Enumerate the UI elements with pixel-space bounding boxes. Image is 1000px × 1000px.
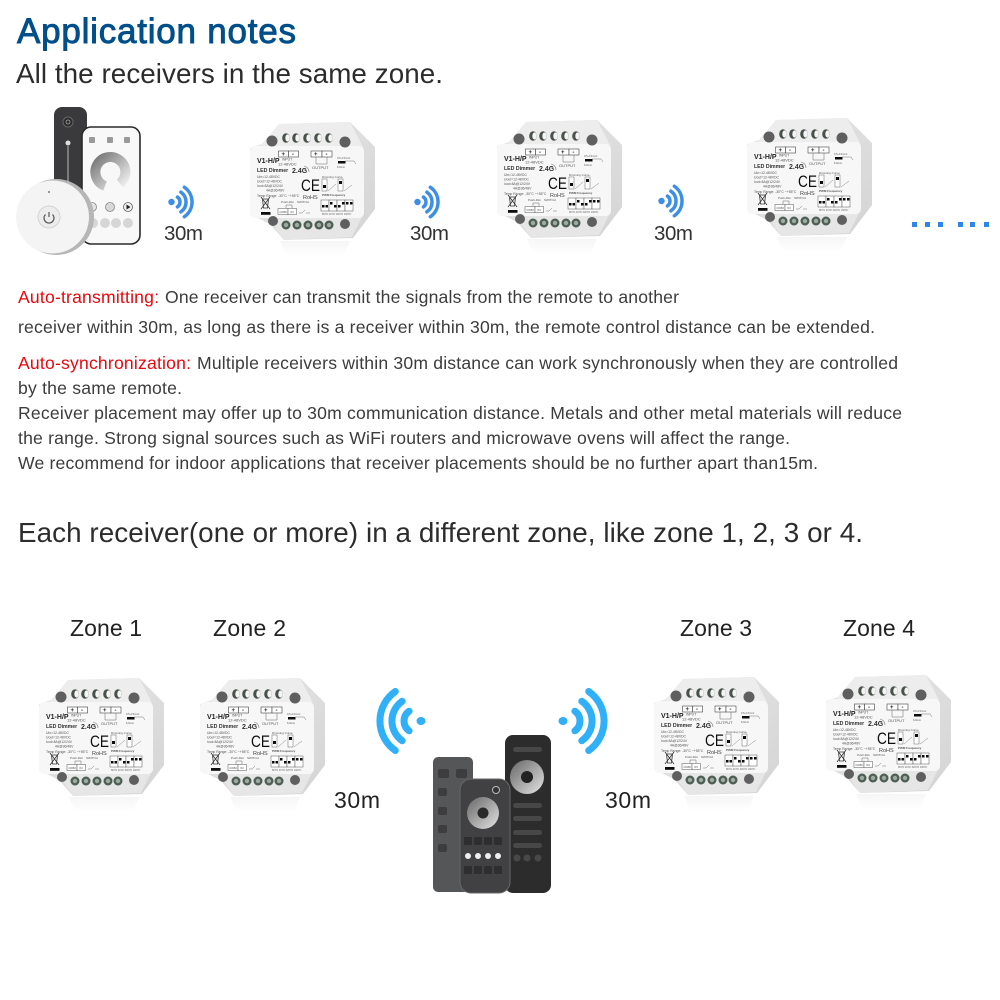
- text block: auto-synchronization: Auto-synchronization:: [18, 353, 191, 373]
- right distance label: 30m: [605, 787, 651, 813]
- text block: auto-transmitting: One receiver can transmit the signals from the remote to another: [165, 287, 679, 307]
- dark remote controls group: [433, 735, 551, 893]
- zone 3 receiver: [654, 677, 779, 810]
- wifi icon 3: [660, 186, 682, 216]
- zone 2 label: Zone 2: [213, 615, 286, 641]
- distance label 1: 30m: [164, 222, 203, 245]
- zone 3 label: Zone 3: [680, 615, 752, 641]
- left distance label: 30m: [334, 787, 380, 813]
- title: Application notes: [17, 12, 296, 51]
- black slider remote: [54, 107, 87, 197]
- continuation dots: [912, 222, 989, 227]
- receiver 1: [250, 122, 375, 255]
- zone 4 label: Zone 4: [843, 615, 915, 641]
- zone 1 receiver: [39, 678, 164, 811]
- receiver 2: [497, 120, 622, 253]
- distance label 2: 30m: [410, 222, 449, 245]
- distance label 3: 30m: [654, 222, 693, 245]
- text block: auto-transmitting: receiver within 30m, as long as there is a receiver within 30m, the remote control distance can be extended.: [18, 317, 875, 337]
- text block: auto-synchronization: Receiver placement may offer up to 30m communication distance. Metals and other metal materials will reduce: [18, 403, 902, 423]
- front remote with wheel: [460, 779, 510, 893]
- white remote with colour wheel: [82, 127, 140, 244]
- receiver 3: [747, 118, 872, 251]
- round white puck remote: [16, 179, 94, 255]
- text block: auto-synchronization: the range. Strong signal sources such as WiFi routers and microwave ovens will affect the range.: [18, 428, 790, 448]
- wifi icon 1: [170, 187, 192, 217]
- text block: auto-transmitting: Auto-transmitting:: [18, 287, 159, 307]
- text block: auto-synchronization: We recommend for indoor applications that receiver placements should be no further apart than15m.: [18, 453, 818, 473]
- wifi icon 2: [416, 187, 438, 217]
- text block: auto-synchronization: Multiple receivers within 30m distance can work synchronously when they are controlled: [197, 353, 898, 373]
- subheading: different zones: Each receiver(one or more) in a different zone, like zone 1, 2, 3 or 4.: [18, 517, 863, 548]
- black remote with pills: [505, 735, 551, 893]
- zone 4 receiver: [826, 675, 951, 808]
- subheading: same zone: All the receivers in the same zone.: [16, 58, 443, 89]
- grey remote: [433, 757, 473, 892]
- text block: auto-synchronization: [18, 353, 902, 473]
- text block: auto-transmitting: [18, 287, 875, 337]
- text block: auto-synchronization: by the same remote.: [18, 378, 182, 398]
- left wifi icon: [380, 692, 426, 750]
- right wifi icon: [558, 692, 604, 750]
- zone 1 label: Zone 1: [70, 615, 142, 641]
- zone 2 receiver: [200, 678, 325, 811]
- remote controls group: puck, black and white remotes: [16, 107, 140, 255]
